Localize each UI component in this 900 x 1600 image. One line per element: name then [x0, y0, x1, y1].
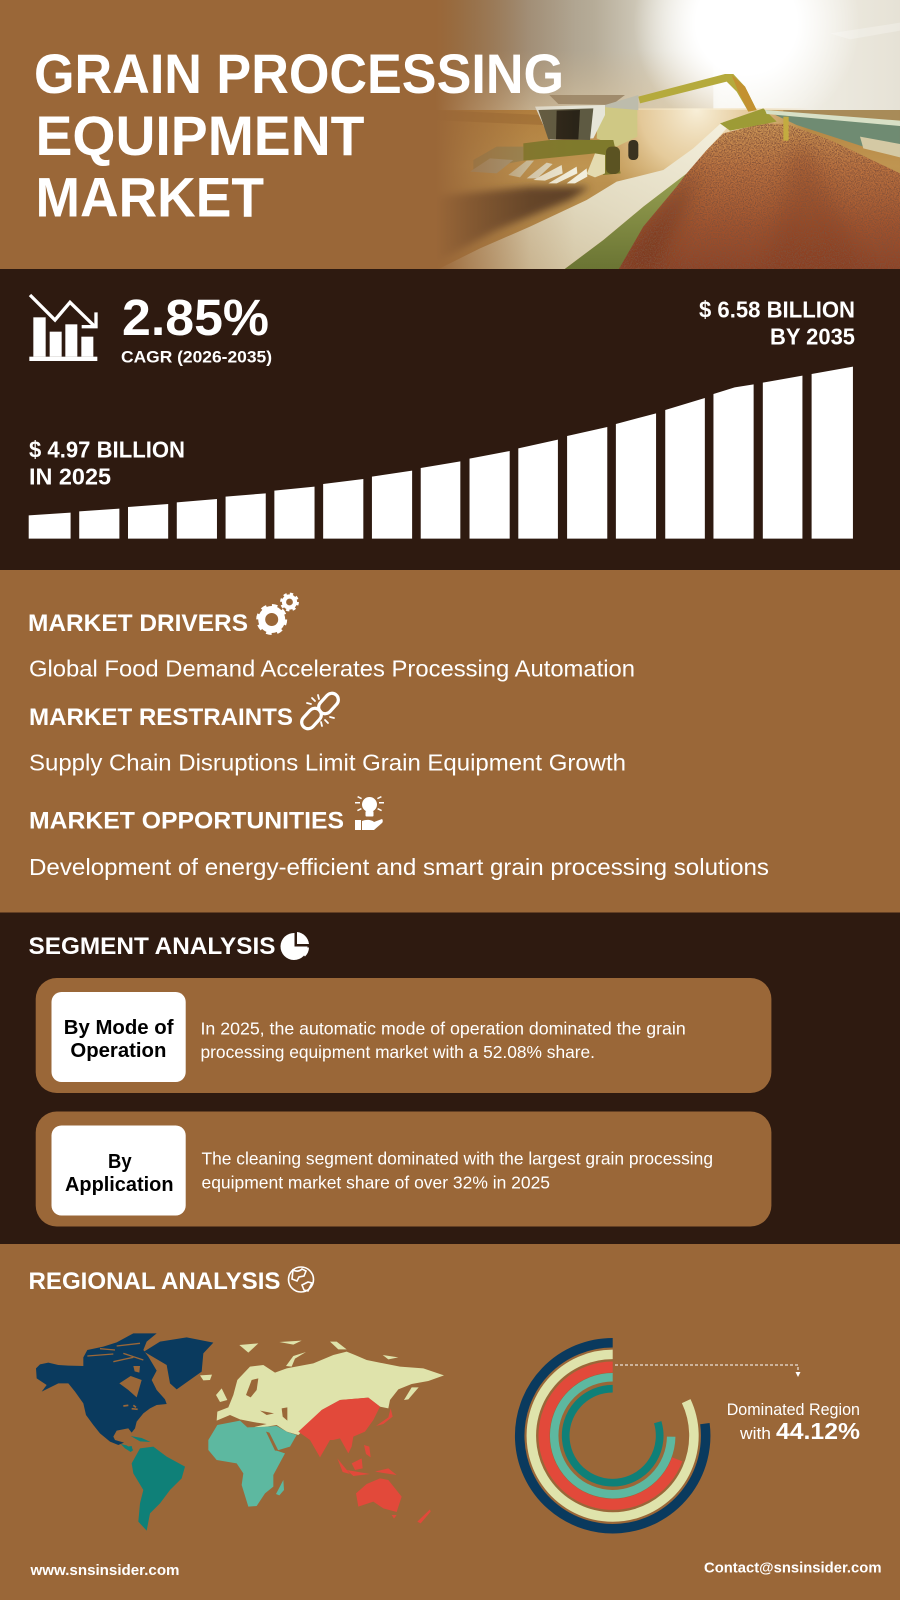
panel: segment analysis — [0, 912, 900, 1244]
heading: market opportunities: MARKET OPPORTUNITIES — [29, 808, 344, 834]
label: by mode of operation: By Mode of — [64, 1017, 174, 1039]
icon: lightbulb in hand — [355, 796, 384, 830]
panel: market size — [0, 269, 900, 570]
heading: segment analysis: SEGMENT ANALYSIS — [28, 933, 276, 960]
photo: combine harvester unloading grain — [430, 0, 900, 270]
text: opportunity: Development of energy-efficient and smart grain processing solutions — [29, 854, 769, 880]
chart: radial share rings — [520, 1343, 706, 1529]
panel: header — [0, 0, 900, 270]
label: by application: Application — [65, 1174, 174, 1196]
label: 2025 value: $ 4.97 BILLION — [29, 436, 185, 462]
arrow: dotted callout leader — [615, 1365, 800, 1377]
region: europe and north asia — [200, 1341, 444, 1435]
region: north america — [36, 1333, 213, 1445]
text: restraint: Supply Chain Disruptions Limit Grain Equipment Growth — [29, 750, 626, 776]
footer: website: www.snsinsider.com — [29, 1562, 180, 1579]
heading: regional analysis: REGIONAL ANALYSIS — [28, 1268, 280, 1295]
text: application finding: equipment market share of over 32% in 2025 — [202, 1172, 550, 1192]
label: by application: By — [108, 1151, 132, 1173]
icon: globe — [288, 1267, 314, 1292]
label: 2035 value — [699, 296, 855, 350]
callout: dominated region share: with — [739, 1425, 771, 1443]
world map — [36, 1333, 444, 1531]
region: asia pacific — [298, 1398, 431, 1523]
region: south america — [121, 1436, 185, 1531]
text: driver: Global Food Demand Accelerates Processing Automation — [29, 656, 635, 682]
panel: market dynamics — [0, 570, 900, 913]
title: GRAIN PROCESSING — [34, 42, 564, 105]
bar chart: market growth — [29, 367, 853, 539]
icon: declining chart — [29, 295, 97, 361]
callout: dominated region share: Dominated Region — [727, 1401, 860, 1419]
text: application finding — [202, 1148, 713, 1192]
text: mode of operation finding: processing equipment market with a 52.08% share. — [200, 1042, 595, 1062]
footer: contact email: Contact@snsinsider.com — [704, 1560, 882, 1576]
label: 2025 value: IN 2025 — [29, 464, 111, 490]
region: africa and middle east — [208, 1421, 297, 1507]
title: MARKET — [36, 166, 264, 228]
label: by mode of operation — [52, 992, 186, 1082]
label: 2025 value — [29, 436, 185, 490]
callout: dominated region share — [727, 1401, 860, 1444]
stat: CAGR: CAGR (2026-2035) — [121, 348, 272, 366]
heading: market restraints: MARKET RESTRAINTS — [29, 704, 293, 731]
card: by application — [36, 1112, 771, 1226]
icon: broken chain — [299, 691, 341, 731]
label: 2035 value: BY 2035 — [770, 324, 855, 350]
label: by mode of operation: Operation — [70, 1040, 166, 1062]
card: by mode of operation — [36, 978, 771, 1093]
callout: dominated region share: 44.12% — [776, 1418, 860, 1444]
icon: gears — [258, 594, 298, 633]
text: application finding: The cleaning segment dominated with the largest grain processing — [202, 1148, 713, 1168]
icon: pie chart — [281, 932, 309, 960]
text: mode of operation finding: In 2025, the automatic mode of operation dominated the grain — [200, 1018, 686, 1038]
stat: CAGR: 2.85% — [122, 289, 269, 346]
title — [34, 42, 564, 228]
panel: regional analysis — [0, 1244, 900, 1600]
label: by application — [52, 1126, 186, 1216]
title: EQUIPMENT — [36, 104, 364, 167]
heading: market drivers: MARKET DRIVERS — [28, 610, 248, 637]
text: mode of operation finding — [200, 1018, 686, 1062]
label: 2035 value: $ 6.58 BILLION — [699, 296, 855, 322]
